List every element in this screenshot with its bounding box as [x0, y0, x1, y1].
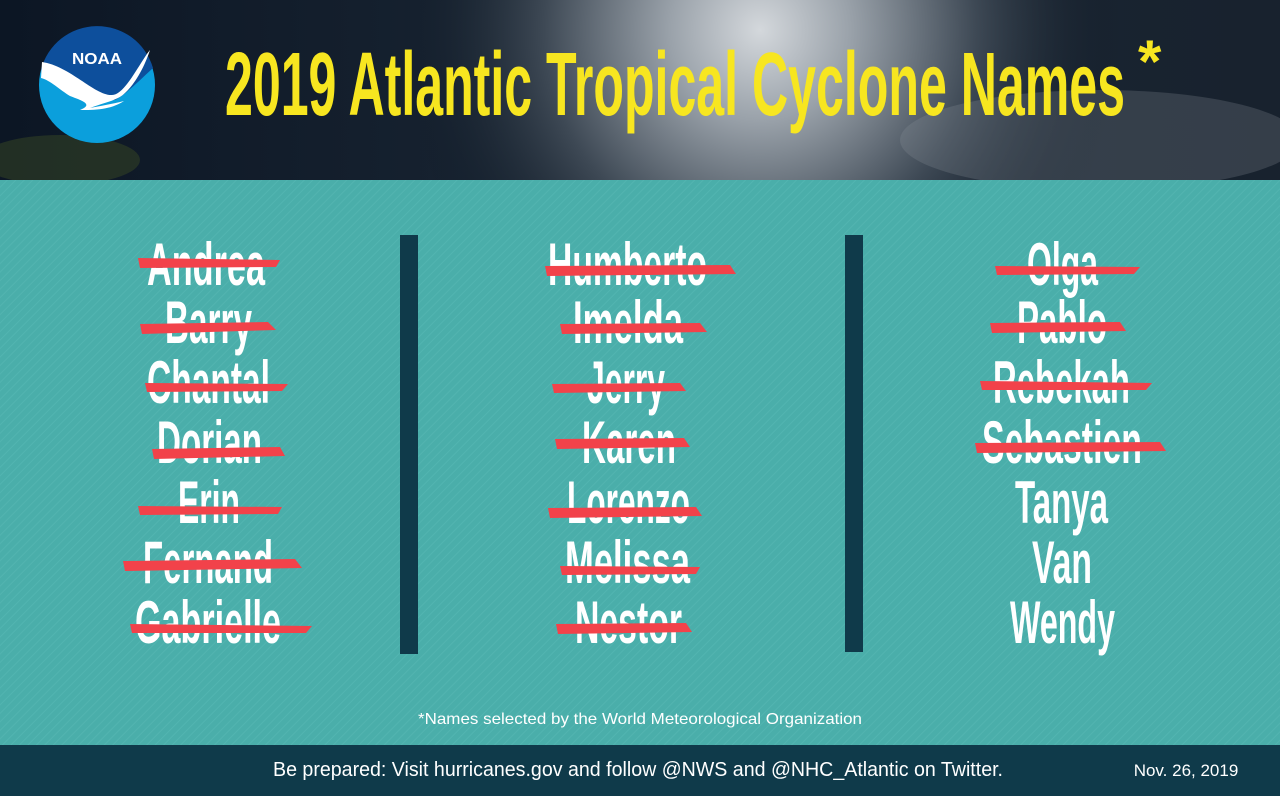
column 1 names: Dorian — [157, 409, 262, 476]
column 1 names: Erin — [178, 469, 240, 536]
divider 2 — [845, 235, 863, 652]
column 2 names: Karen — [582, 409, 676, 476]
divider 1 — [400, 235, 418, 654]
column 2 names — [548, 231, 707, 656]
column 1 names: Gabrielle — [135, 589, 281, 656]
icon: NOAA logo: NOAA — [72, 51, 122, 68]
column 3 names: Wendy — [1010, 589, 1115, 656]
column 3 names: Rebekah — [993, 349, 1130, 416]
icon: NOAA logo — [39, 26, 155, 143]
column 2 names: Lorenzo — [567, 469, 690, 536]
column 3 names: Tanya — [1015, 469, 1108, 536]
column 1 names: Barry — [165, 289, 252, 356]
column 1 names: Fernand — [143, 529, 273, 596]
teal panel — [0, 180, 1280, 745]
column 3 names: Pablo — [1017, 289, 1107, 356]
column 3 names — [982, 231, 1142, 656]
column 1 names: Chantal — [147, 349, 270, 416]
column 2 names: Melissa — [565, 529, 690, 596]
column 1 names: Andrea — [147, 231, 265, 298]
names — [135, 231, 1142, 656]
column 3 names: Olga — [1027, 231, 1098, 298]
column 2 names: Jerry — [587, 349, 665, 416]
column 2 names: Nestor — [575, 589, 682, 656]
date: Nov. 26, 2019 — [1134, 761, 1238, 780]
column 1 names — [135, 231, 281, 656]
column 3 names: Sebastien — [982, 409, 1142, 476]
red strike-throughs — [123, 258, 1166, 634]
footer bar — [0, 745, 1280, 796]
column 2 names: Humberto — [548, 231, 707, 298]
column 3 names: Van — [1032, 529, 1092, 596]
footer message: Be prepared: Visit hurricanes.gov and follow @NWS and @NHC_Atlantic on Twitter. — [273, 759, 1003, 781]
header background — [0, 0, 1280, 190]
footnote: *Names selected by the World Meteorological Organization — [418, 711, 862, 728]
column 2 names: Imelda — [573, 289, 683, 356]
title asterisk: * — [1138, 28, 1162, 95]
